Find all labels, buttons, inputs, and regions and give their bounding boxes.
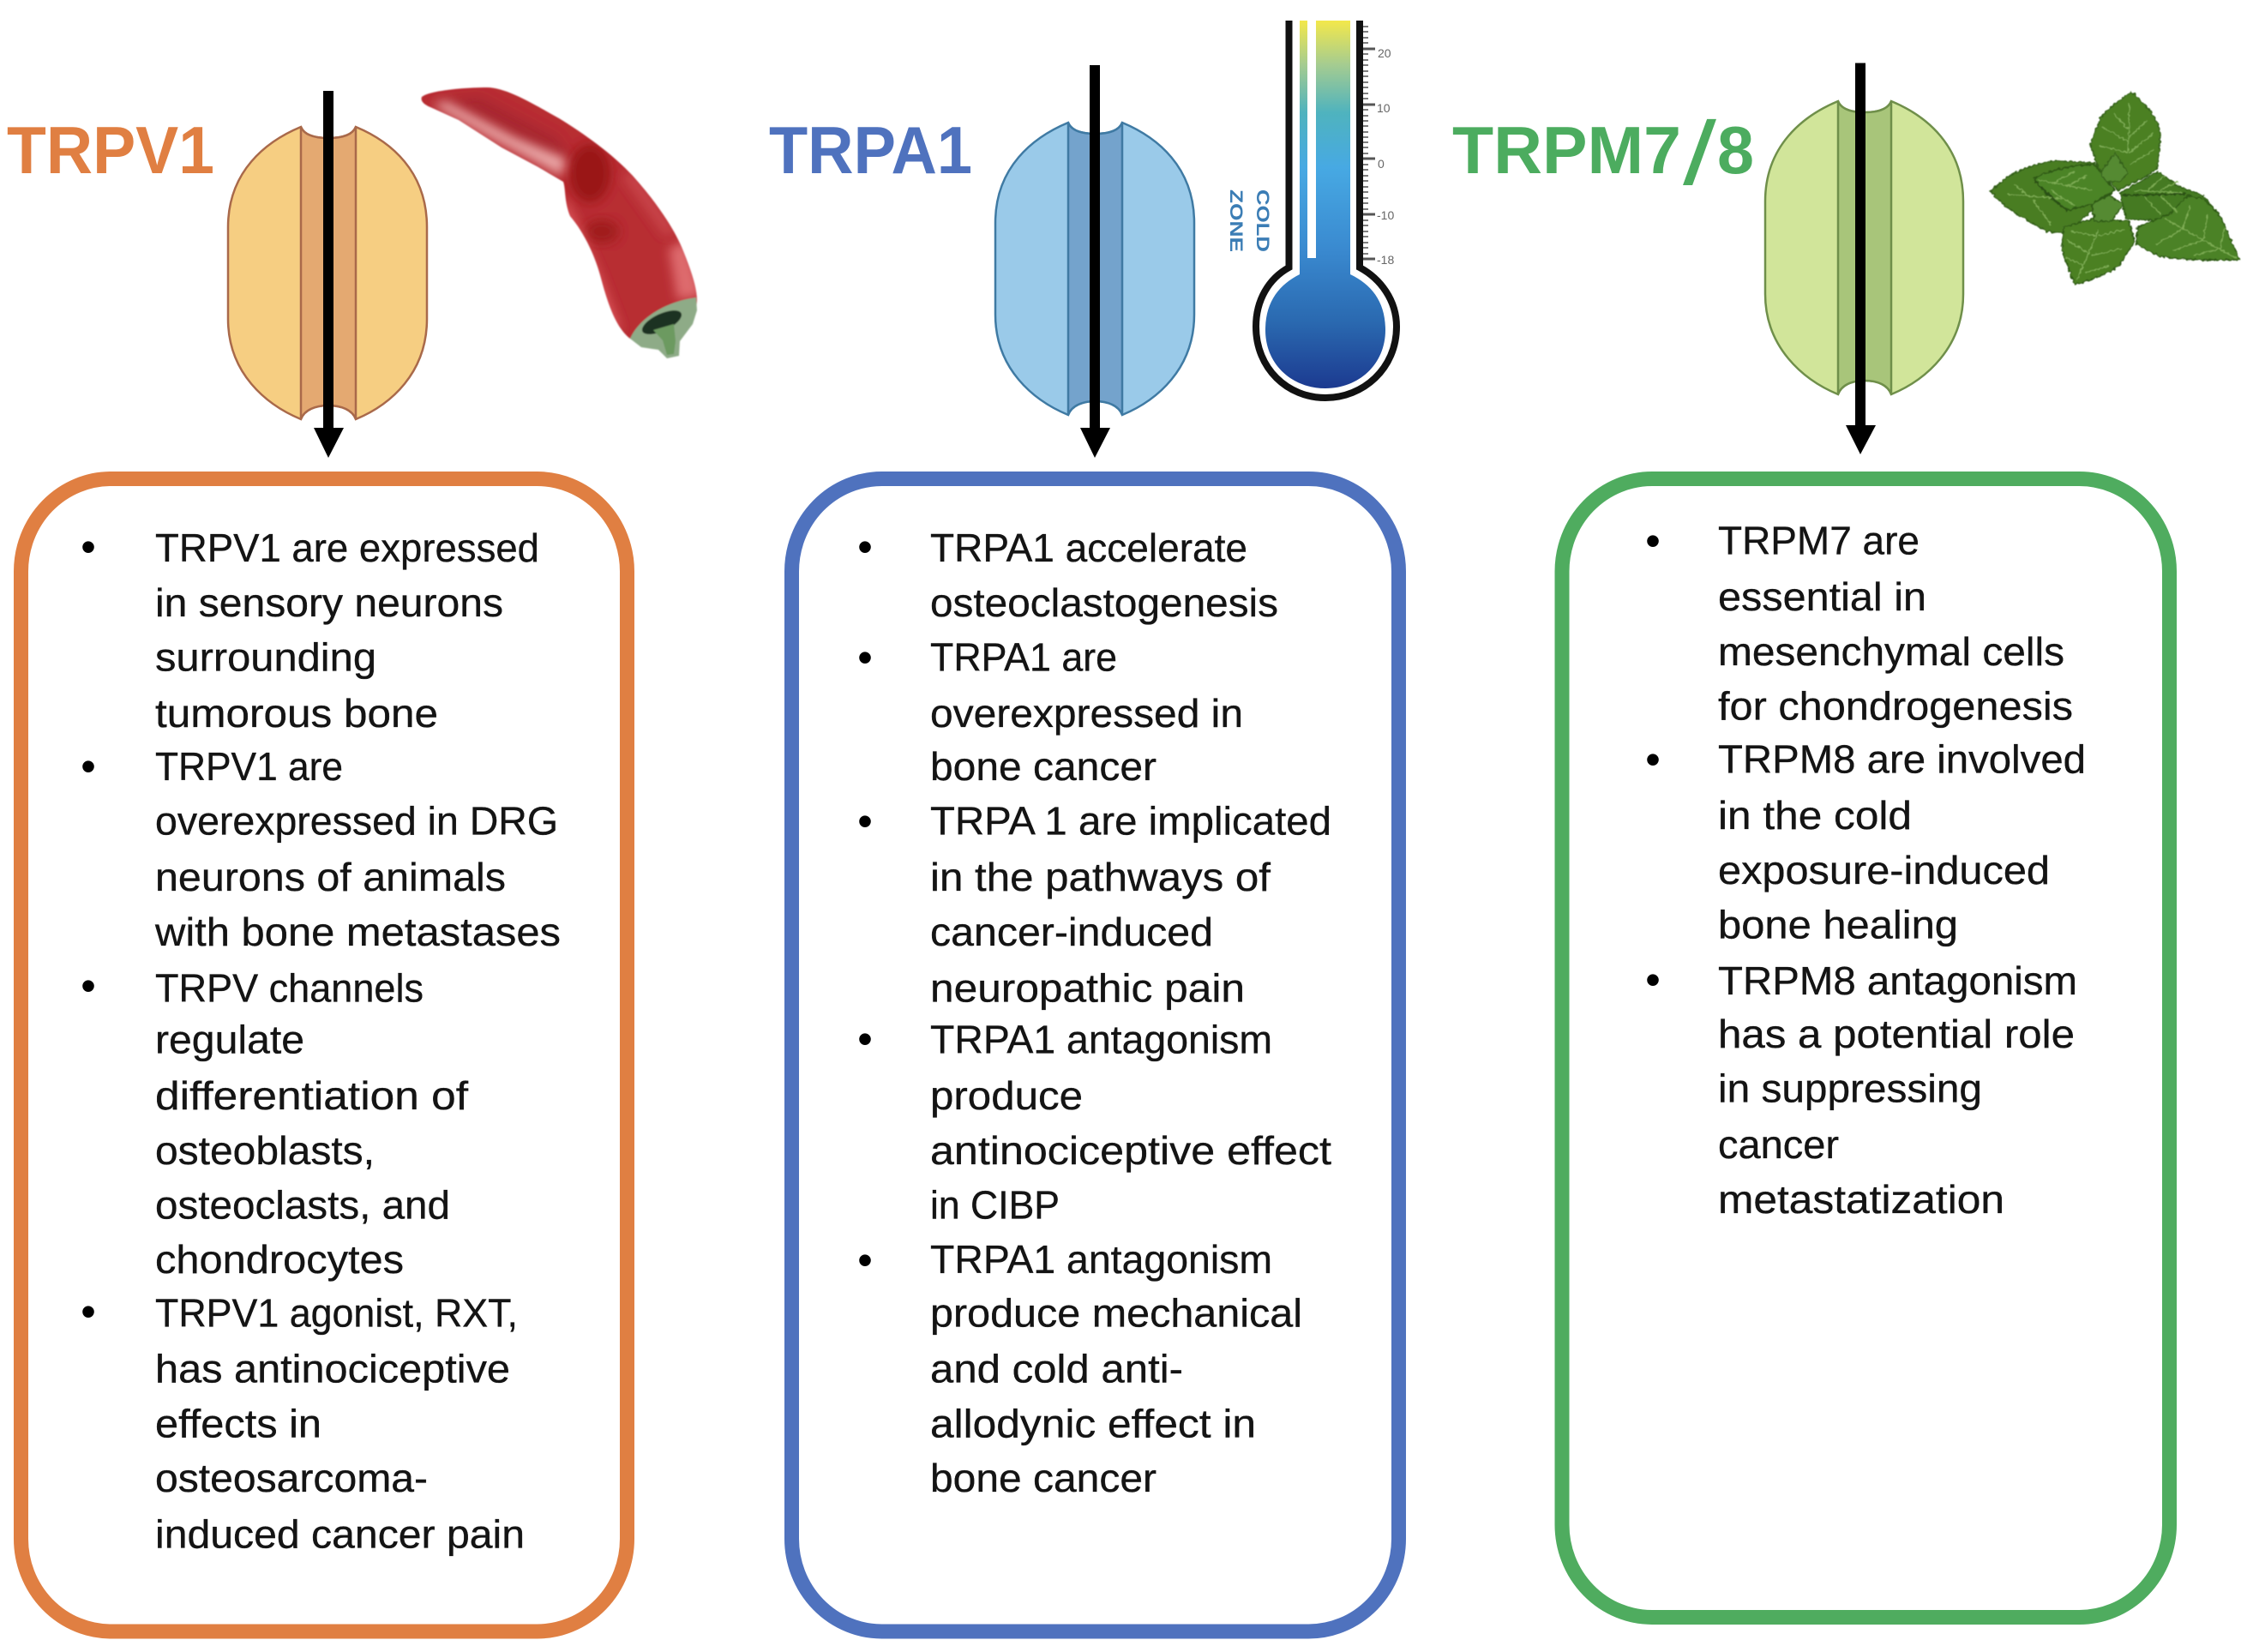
- text block: TRPV1 findings: overexpressed in DRG: [155, 799, 558, 844]
- leaf: small top: [2100, 153, 2128, 182]
- text block: TRPA1 findings: bone cancer: [930, 1456, 1157, 1500]
- heading: TRPM7/8: /: [1683, 104, 1717, 204]
- scale labels: -10: [1377, 208, 1394, 222]
- text block: TRPV1 findings: •: [81, 523, 96, 571]
- heading: TRPA1: TRPA1: [769, 112, 972, 188]
- text block: TRPV1 findings: neurons of animals: [155, 855, 506, 899]
- text block: TRPM7/8 findings: cancer: [1718, 1122, 1839, 1167]
- text block: TRPA1 findings: antinociceptive effect: [930, 1128, 1331, 1173]
- text block: TRPM7/8 findings: metastatization: [1718, 1177, 2004, 1222]
- text block: TRPV1 findings: •: [81, 742, 96, 790]
- text block: TRPV1 findings: •: [81, 1288, 96, 1336]
- text block: TRPA1 findings: TRPA1 accelerate: [930, 526, 1247, 570]
- text block: TRPM7/8 findings: •: [1645, 517, 1661, 565]
- leaf: bottom: [2062, 219, 2135, 285]
- text block: TRPM7/8 findings: bone healing: [1718, 902, 1958, 946]
- label: cold zone: ZONE: [1226, 189, 1246, 252]
- chili stem: [630, 297, 697, 358]
- icon: thermometer: [1226, 21, 1397, 398]
- text block: TRPM7/8 findings: mesenchymal cells: [1718, 629, 2064, 674]
- text block: TRPA1 findings: cancer-induced: [930, 910, 1213, 954]
- icon: TRPM7/8 ion channel: [1765, 101, 1963, 394]
- text block: TRPM7/8 findings: in the cold: [1718, 793, 1912, 838]
- leaf: back left: [1991, 161, 2115, 233]
- scale labels: 10: [1377, 101, 1391, 115]
- leaf: top: [2090, 92, 2160, 190]
- leaf: right: [2136, 195, 2239, 260]
- text block: TRPA1 findings: overexpressed in: [930, 691, 1243, 736]
- leaf: front left: [2034, 165, 2115, 210]
- text block: TRPA1 findings: allodynic effect in: [930, 1401, 1256, 1445]
- leaf: right back: [2120, 171, 2220, 225]
- text block: TRPA1 findings: produce mechanical: [930, 1290, 1302, 1335]
- text block: TRPV1 findings: osteoclasts, and: [155, 1183, 450, 1228]
- scale labels: [1377, 46, 1394, 267]
- icon: TRPA1 ion channel: [995, 123, 1194, 415]
- text block: TRPM7/8 findings: essential in: [1718, 574, 1926, 619]
- text block: TRPA1 findings: and cold anti-: [930, 1347, 1183, 1391]
- heading: TRPV1: TRPV1: [7, 112, 214, 188]
- text block: TRPV1 findings: TRPV1 are expressed: [155, 526, 539, 570]
- leaf: small centre: [2092, 195, 2124, 221]
- icon: TRPV1 ion channel: [228, 127, 427, 419]
- text block: TRPA1 findings: TRPA1 are: [930, 635, 1117, 680]
- text block: TRPM7/8 findings: TRPM8 are involved: [1718, 737, 2086, 782]
- text block: TRPA1 findings: in CIBP: [930, 1183, 1060, 1228]
- arrow: TRPA1 flux: [1080, 65, 1110, 458]
- text block: TRPA1 findings: TRPA 1 are implicated: [930, 799, 1331, 844]
- text block: TRPV1 findings: osteoblasts,: [155, 1128, 375, 1173]
- text block: TRPV1 findings: chondrocytes: [155, 1237, 404, 1282]
- text block: TRPM7/8 findings: TRPM7 are: [1718, 519, 1920, 563]
- text block: TRPA1 findings: •: [857, 797, 873, 845]
- heading: TRPM7/8: 8: [1717, 112, 1754, 188]
- text block: TRPV1 findings: tumorous bone: [155, 691, 438, 736]
- text block: TRPM7/8 findings: exposure-induced: [1718, 848, 2050, 892]
- icon: red chili pepper: [416, 81, 707, 358]
- text block: TRPA1 findings: •: [857, 523, 873, 571]
- scale labels: 0: [1378, 157, 1385, 171]
- text block: TRPM7/8 findings: •: [1645, 956, 1661, 1004]
- text block: TRPM7/8 findings: has a potential role: [1718, 1012, 2075, 1056]
- text block: TRPM7/8 findings: [1645, 517, 2086, 1222]
- text block: TRPV1 findings: with bone metastases: [154, 910, 561, 954]
- text block: TRPA1 findings: neuropathic pain: [930, 965, 1245, 1010]
- text block: TRPV1 findings: regulate: [155, 1018, 304, 1062]
- text block: TRPV1 findings: effects in: [155, 1401, 321, 1445]
- text block: TRPV1 findings: TRPV1 are: [155, 744, 343, 789]
- text block: TRPA1 findings: [857, 523, 1331, 1500]
- text block: TRPM7/8 findings: for chondrogenesis: [1718, 684, 2073, 729]
- text block: TRPA1 findings: bone cancer: [930, 744, 1157, 789]
- scale labels: 20: [1378, 46, 1391, 60]
- text block: TRPV1 findings: TRPV1 agonist, RXT,: [155, 1290, 518, 1335]
- panel: TRPV1: [21, 478, 628, 1631]
- scale labels: -18: [1377, 253, 1394, 267]
- text block: TRPM7/8 findings: •: [1645, 736, 1661, 784]
- label: cold zone: COLD: [1253, 189, 1272, 252]
- text block: TRPA1 findings: in the pathways of: [930, 855, 1271, 899]
- text block: TRPV1 findings: differentiation of: [155, 1073, 468, 1118]
- heading: TRPM7/8: TRPM7: [1452, 112, 1681, 188]
- leaf veins: [2006, 103, 2236, 281]
- text block: TRPA1 findings: •: [857, 634, 873, 682]
- text block: TRPA1 findings: osteoclastogenesis: [930, 580, 1278, 625]
- panel: TRPA1: [792, 478, 1399, 1631]
- arrow: TRPM7/8 flux: [1846, 63, 1876, 454]
- text block: TRPV1 findings: TRPV channels: [155, 965, 424, 1010]
- scale ticks: [1363, 27, 1375, 259]
- heading: TRPM7/8: [1452, 104, 1754, 204]
- text block: TRPA1 findings: •: [857, 1236, 873, 1284]
- text block: TRPA1 findings: TRPA1 antagonism: [930, 1018, 1272, 1062]
- label: cold zone: [1226, 189, 1272, 252]
- text block: TRPV1 findings: osteosarcoma-: [155, 1456, 428, 1500]
- text block: TRPM7/8 findings: in suppressing: [1718, 1066, 1982, 1111]
- text block: TRPM7/8 findings: TRPM8 antagonism: [1718, 958, 2077, 1003]
- text block: TRPV1 findings: has antinociceptive: [155, 1347, 510, 1391]
- text block: TRPA1 findings: produce: [930, 1073, 1083, 1118]
- text block: TRPV1 findings: in sensory neurons: [155, 580, 503, 625]
- text block: TRPV1 findings: [81, 523, 561, 1557]
- arrow: TRPV1 flux: [314, 91, 344, 458]
- text block: TRPV1 findings: •: [81, 962, 96, 1010]
- text block: TRPV1 findings: induced cancer pain: [155, 1512, 525, 1557]
- icon: mint leaves: [1991, 92, 2239, 285]
- text block: TRPV1 findings: surrounding: [155, 635, 376, 680]
- text block: TRPA1 findings: TRPA1 antagonism: [930, 1237, 1272, 1282]
- text block: TRPA1 findings: •: [857, 1015, 873, 1063]
- panel: TRPM7/8: [1562, 478, 2169, 1617]
